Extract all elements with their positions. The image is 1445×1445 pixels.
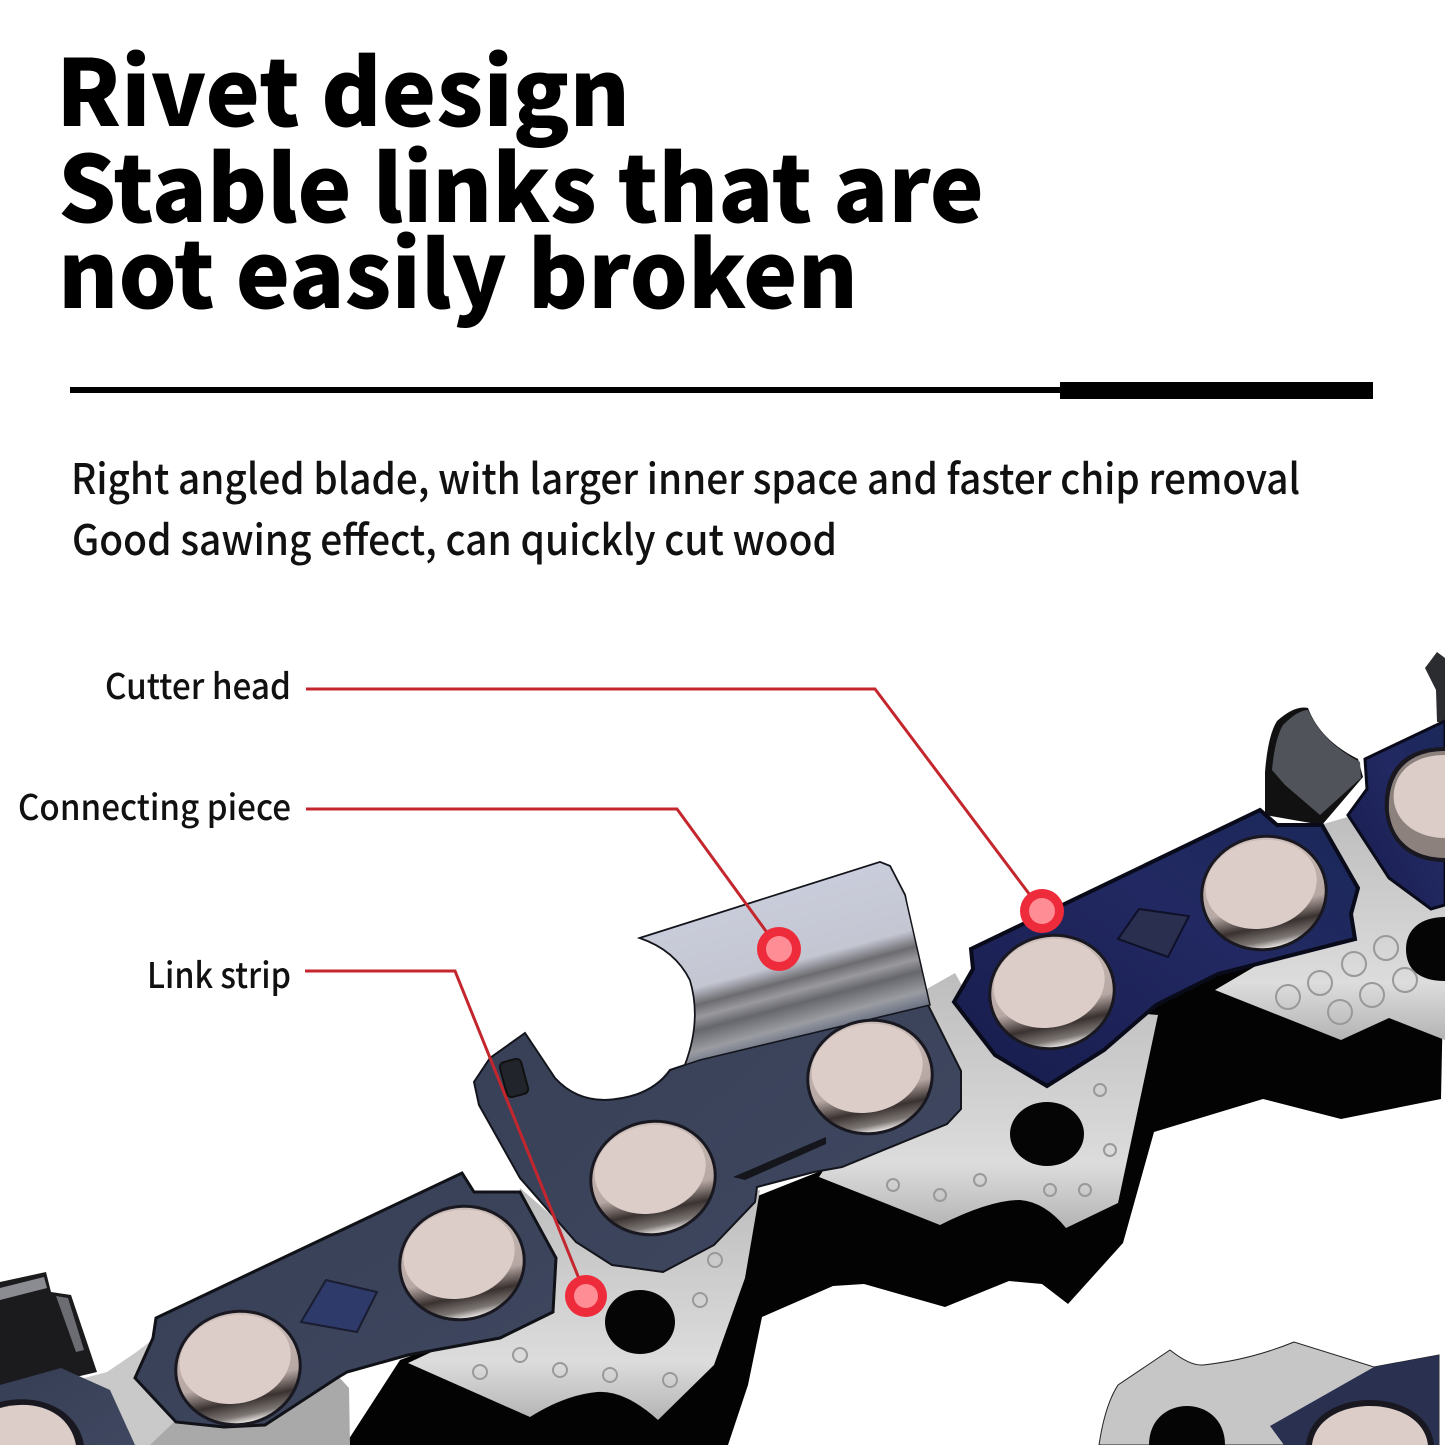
navy diamond mark [1118,909,1189,957]
rivet holes in straps [605,917,1445,1354]
silver fragment lower left [150,1375,350,1445]
lower left slate plate [135,1173,556,1427]
top right cutter spike [1425,652,1445,722]
bottom left rivet [0,1399,84,1445]
silver link strap middle [819,973,1158,1228]
chain black underside shadow [345,900,1445,1445]
callout: link strip: Link strip [147,948,291,999]
leftmost plate [0,1368,135,1445]
title: Stable links that are [58,116,984,249]
callout: connecting piece: Connecting piece [18,780,291,831]
left rear dark cutter [0,1272,97,1395]
silver strip between lower plates [69,1338,175,1445]
description text [71,446,1300,568]
navy plate right [1348,721,1445,909]
divider rule [70,382,1373,399]
callout: connecting piece [18,780,801,971]
silver link strap right [1215,812,1445,1040]
description text: Right angled blade, with larger inner space and faster chip removal [71,446,1300,507]
central cutter body slate [474,862,961,1272]
title: Rivet design [56,20,630,153]
cutter bright tooth face [640,862,930,1065]
bottom right chain fragment [1099,1342,1439,1445]
dimple pattern on straps [473,936,1417,1387]
lower left blue diamond mark [301,1280,377,1332]
cutter depth gauge mark [499,1058,529,1098]
callout: cutter head [105,659,1064,933]
silver link strap left [408,1188,760,1420]
right edge rivet [1385,747,1445,862]
title: not easily broken [58,202,858,335]
navy plate: cutter head link [954,810,1358,1086]
callout: link strip [147,948,607,1317]
rivets [163,823,1339,1438]
description text: Good sawing effect, can quickly cut wood [72,507,837,568]
callout: cutter head: Cutter head [105,659,291,710]
rear dark cutter tooth [1265,708,1363,825]
title [56,20,984,335]
cutter slot mark [733,1137,826,1180]
chain photo illustration [0,652,1445,1445]
